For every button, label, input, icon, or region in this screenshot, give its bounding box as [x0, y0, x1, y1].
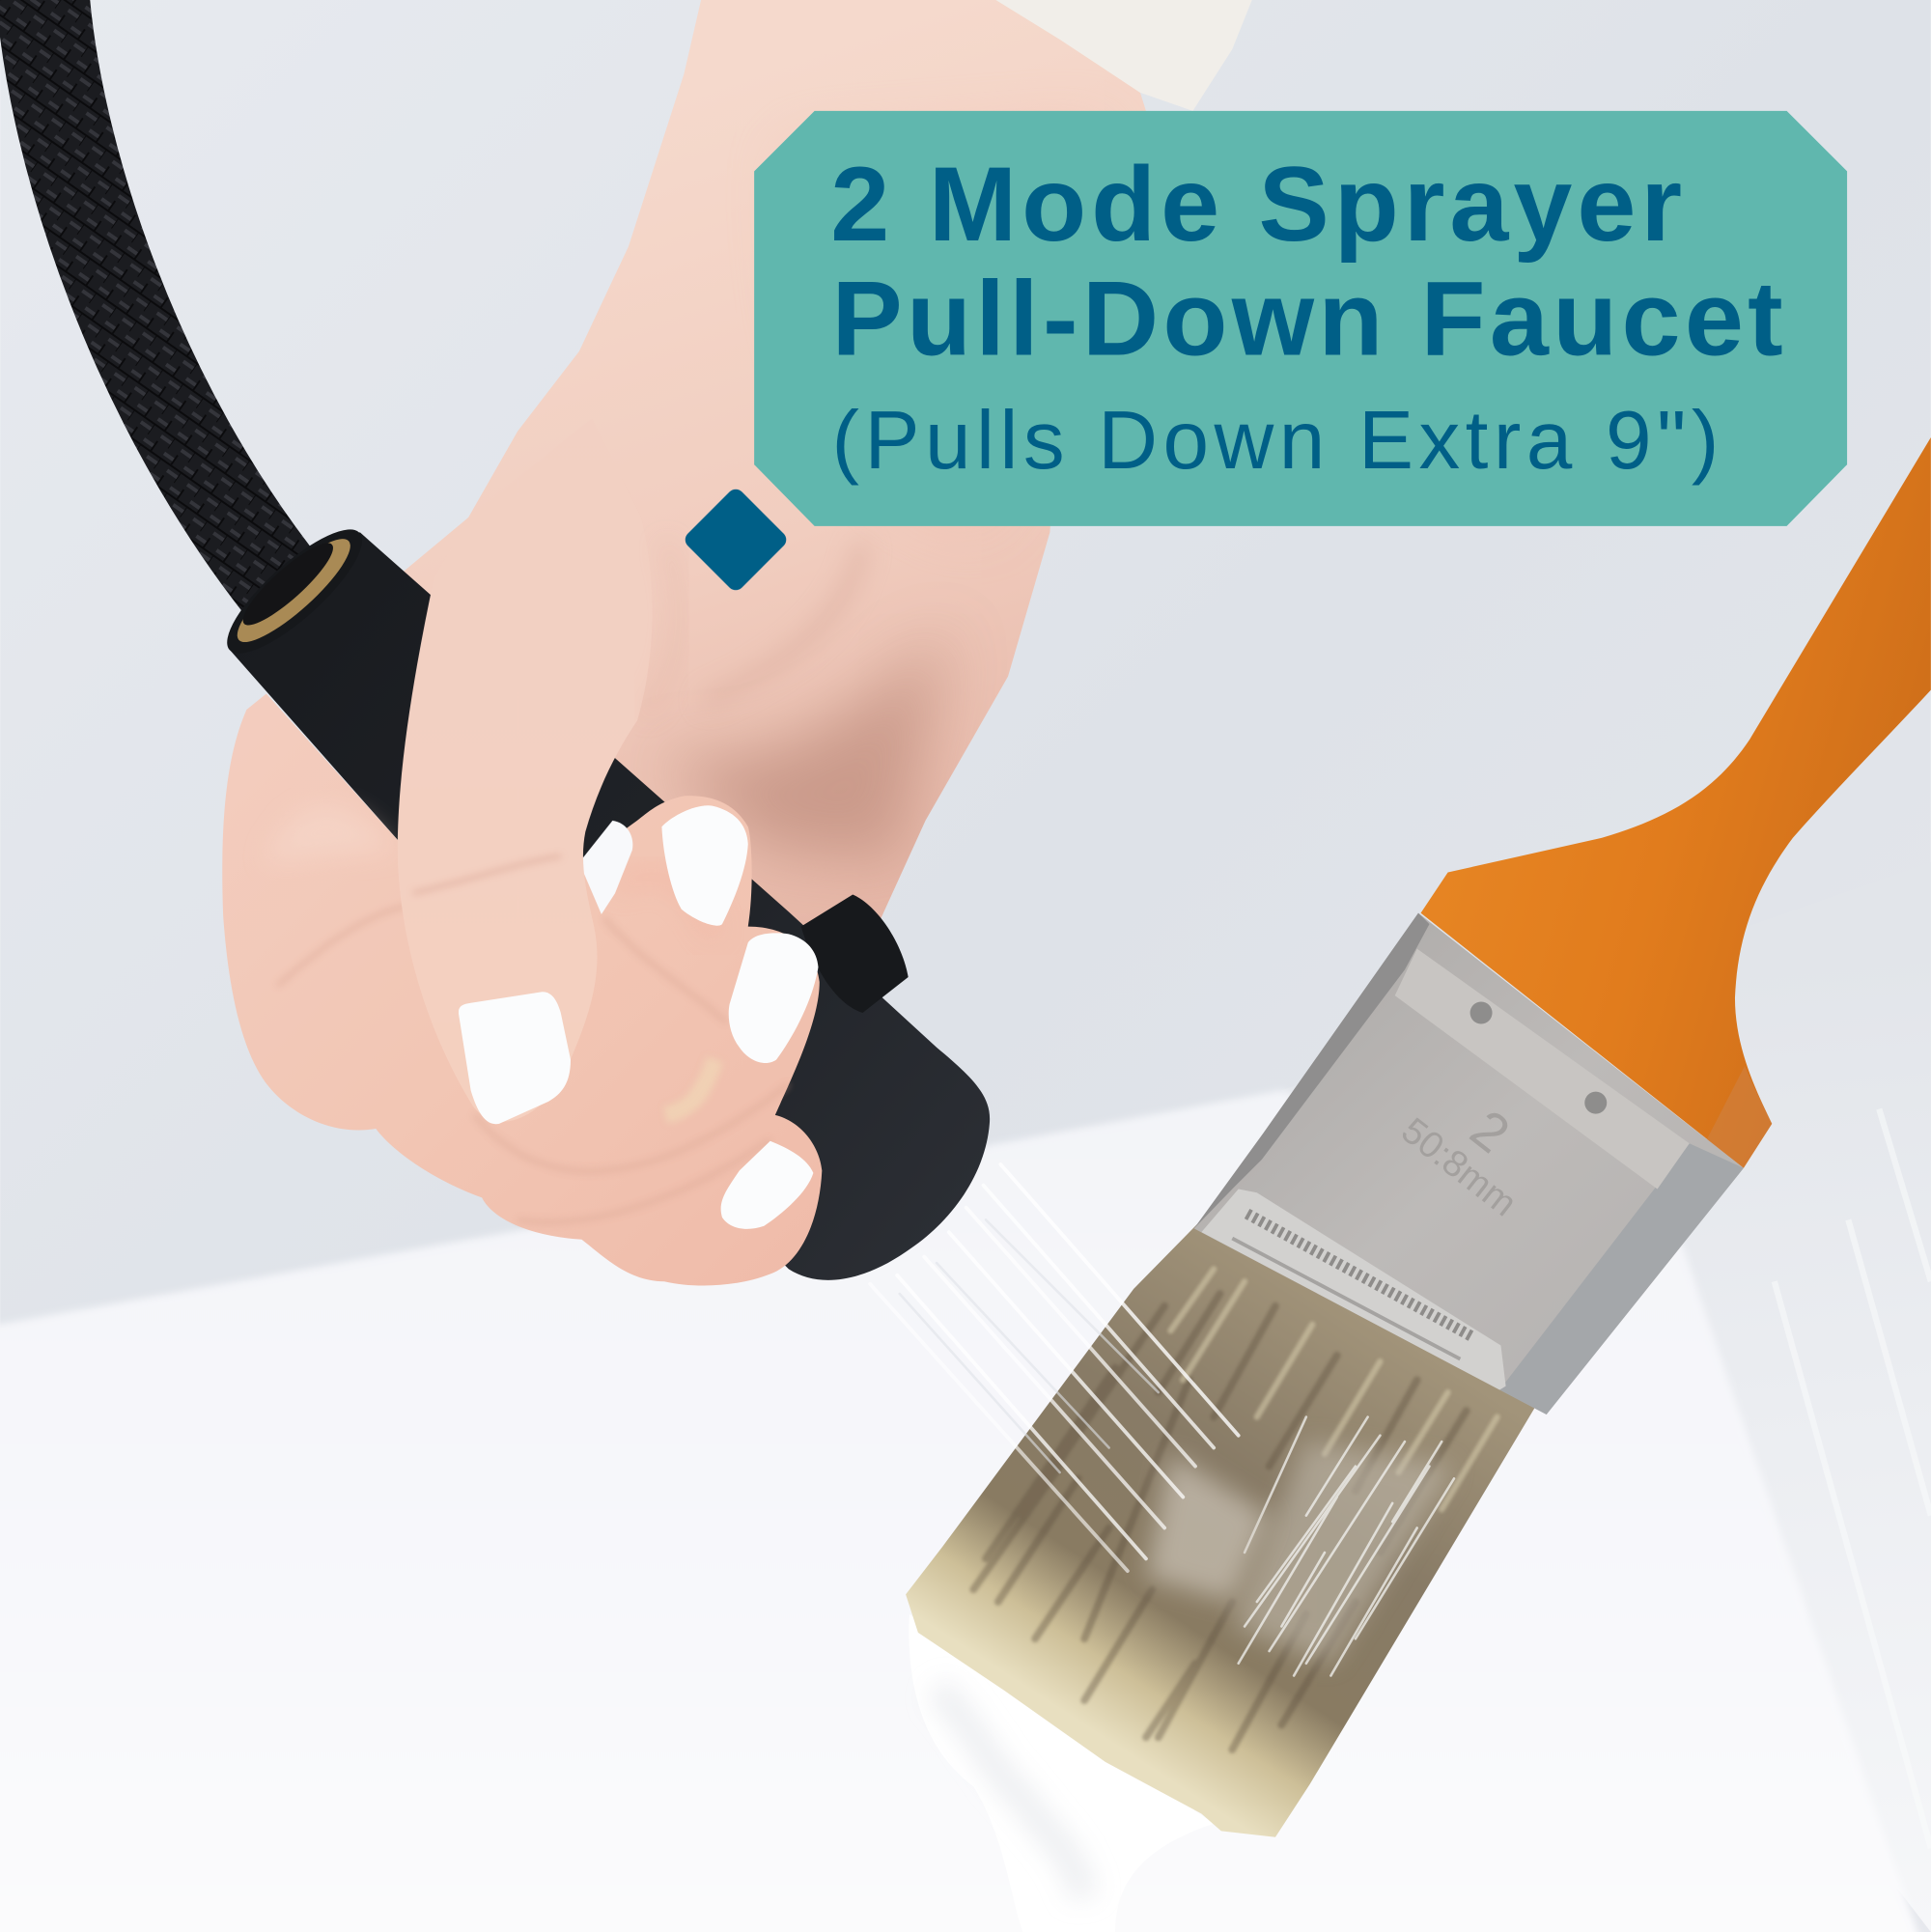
brush handle: orange wood [1421, 437, 1931, 1168]
brush bristles [906, 1219, 1540, 1837]
heading line 2: Pull-Down Faucet [832, 261, 1783, 378]
brush ferrule: steel [1194, 913, 1744, 1414]
background: right side wall [1281, 862, 1931, 1932]
sprayer head: matte black [211, 513, 990, 1280]
background: wall streaks [1775, 1109, 1931, 1848]
hand: wrist and palm [395, 0, 1146, 1010]
nail: index finger [579, 821, 632, 914]
hand: thumb [398, 419, 679, 1122]
hand: fingers and fist [222, 693, 822, 1286]
title panel: teal octagon [754, 111, 1847, 526]
sprayer mode button [801, 894, 909, 1013]
callout marker: diamond [682, 486, 790, 594]
hose: black braided [42, 0, 286, 592]
nail: little finger [721, 1141, 813, 1229]
brass collar [211, 513, 378, 670]
water streams from sprayer [870, 1164, 1239, 1571]
ferrule stamp: 2 [1460, 1098, 1521, 1164]
nail: ring finger [729, 933, 819, 1063]
ferrule stamp: 50:8mm [1393, 1109, 1525, 1224]
finger creases [277, 906, 789, 1222]
subheading: (Pulls Down Extra 9") [832, 395, 1719, 487]
background: sink floor [0, 1090, 1931, 1932]
nail: middle finger [661, 805, 748, 926]
water runoff under brush tip [909, 1614, 1214, 1932]
heading line 1: 2 Mode Sprayer [830, 146, 1682, 264]
paint brush [906, 437, 1931, 1837]
sweater cuff [986, 0, 1254, 111]
nail: thumb [459, 992, 571, 1124]
rivets [1470, 1002, 1493, 1023]
